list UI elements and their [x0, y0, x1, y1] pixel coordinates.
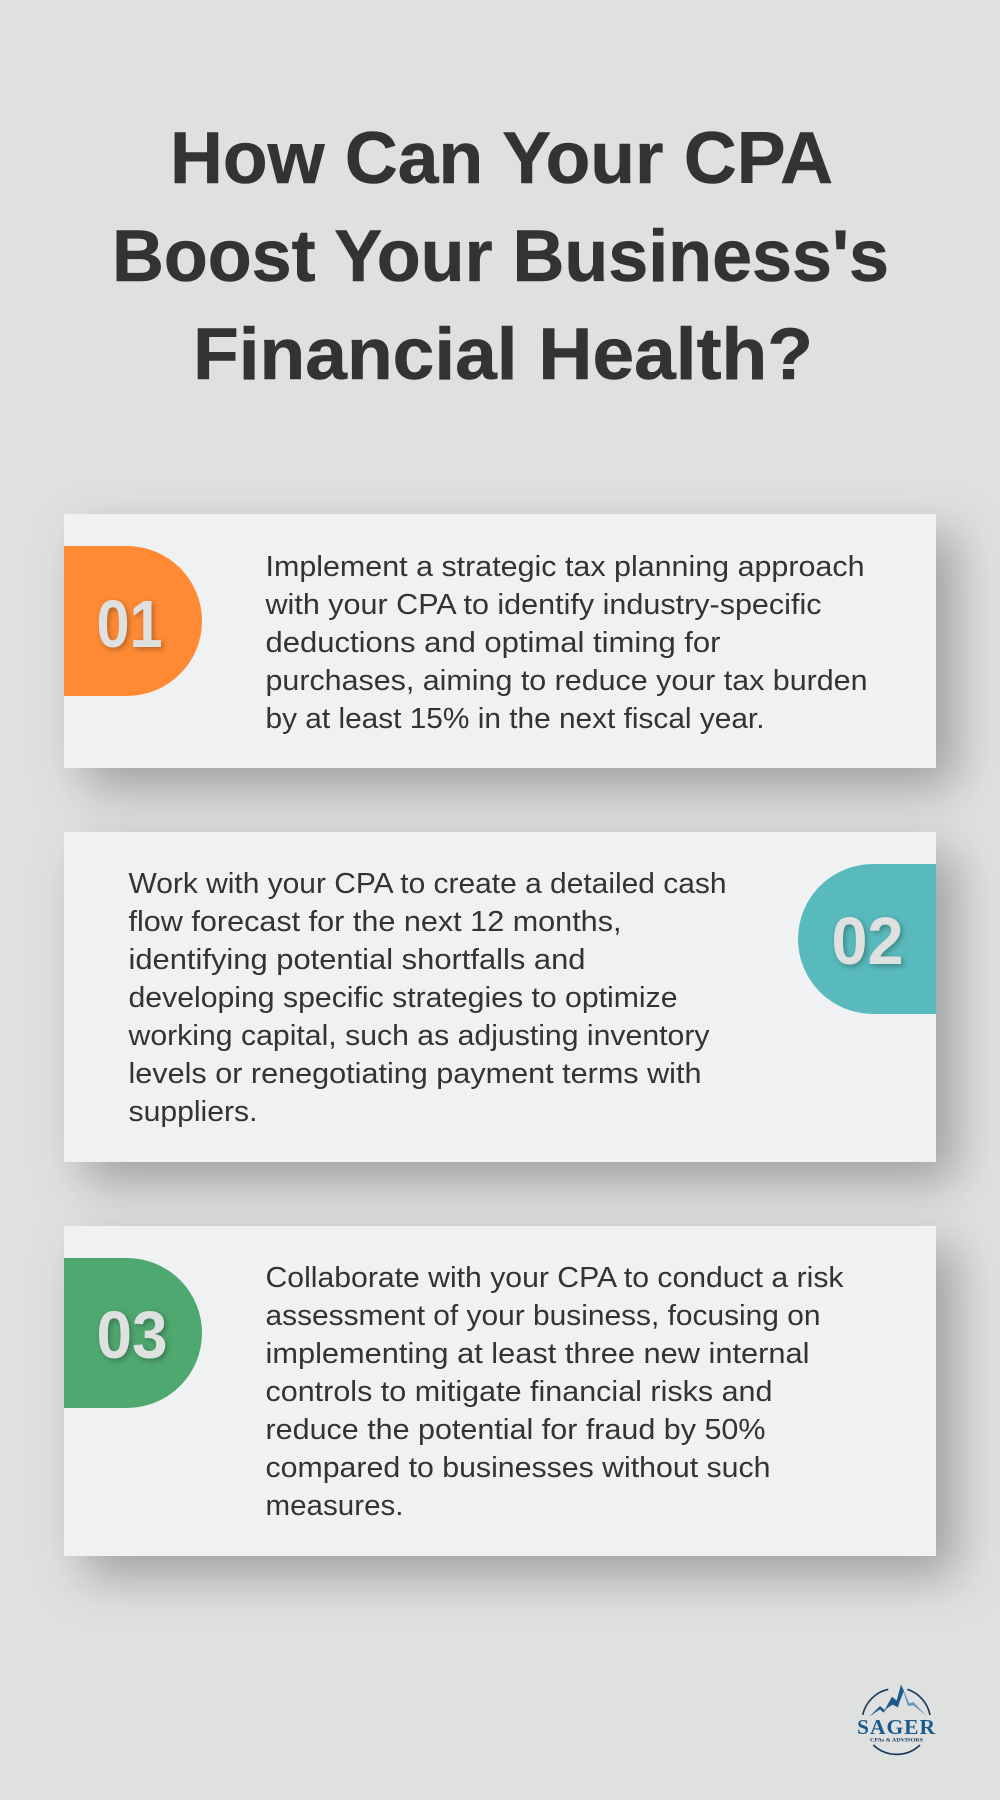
badge 02: 02 [832, 904, 904, 979]
logo: Sager CPAs & Advisors [857, 1685, 935, 1754]
badge 03 [64, 1258, 202, 1408]
text block 01 [264, 551, 868, 735]
logo: Sager CPAs & Advisors: SAGER [857, 1715, 935, 1739]
card background 02 [64, 832, 936, 1162]
text block 03: measures. [266, 1490, 404, 1522]
title: How Can Your CPA [170, 118, 833, 199]
badge 02 [798, 864, 936, 1014]
icon: mountain in broken circle [863, 1685, 930, 1754]
badge 03: 03 [96, 1298, 168, 1373]
title: Boost Your Business's [112, 216, 889, 297]
panel: step 02 [64, 832, 936, 1162]
panel: step 03 [64, 1226, 936, 1556]
panel: step 01 [64, 514, 936, 768]
text block 01: deductions and optimal timing for [266, 627, 721, 659]
text block 03 [266, 1262, 844, 1522]
text block 02: identifying potential shortfalls and [128, 944, 586, 976]
badge 01: 01 [96, 587, 162, 662]
text block 02: flow forecast for the next 12 months, [128, 906, 622, 938]
text block 01: by at least 15% in the next fiscal year. [266, 703, 764, 735]
text block 03: Collaborate with your CPA to conduct a risk [266, 1262, 844, 1294]
text block 03: assessment of your business, focusing on [266, 1300, 820, 1332]
text block 02: suppliers. [128, 1096, 258, 1128]
text block 01: purchases, aiming to reduce your tax burden [266, 665, 868, 697]
logo: Sager CPAs & Advisors: CPAs & ADVISORS [870, 1738, 923, 1744]
text block 02: developing specific strategies to optimize [128, 982, 678, 1014]
text block 02: levels or renegotiating payment terms with [128, 1058, 702, 1090]
text block 02 [127, 868, 726, 1128]
text block 02: working capital, such as adjusting inventory [127, 1020, 710, 1052]
text block 03: compared to businesses without such [266, 1452, 770, 1484]
title [112, 118, 889, 395]
card background 03 [64, 1226, 936, 1556]
text block 01: with your CPA to identify industry-specific [264, 589, 822, 621]
text block 03: controls to mitigate financial risks and [266, 1376, 772, 1408]
text block 03: reduce the potential for fraud by 50% [266, 1414, 766, 1446]
text block 01: Implement a strategic tax planning approach [266, 551, 864, 583]
title: Financial Health? [193, 314, 813, 395]
badge 01 [64, 546, 202, 696]
text block 02: Work with your CPA to create a detailed cash [128, 868, 726, 900]
card background 01 [64, 514, 936, 768]
text block 03: implementing at least three new internal [266, 1338, 810, 1370]
